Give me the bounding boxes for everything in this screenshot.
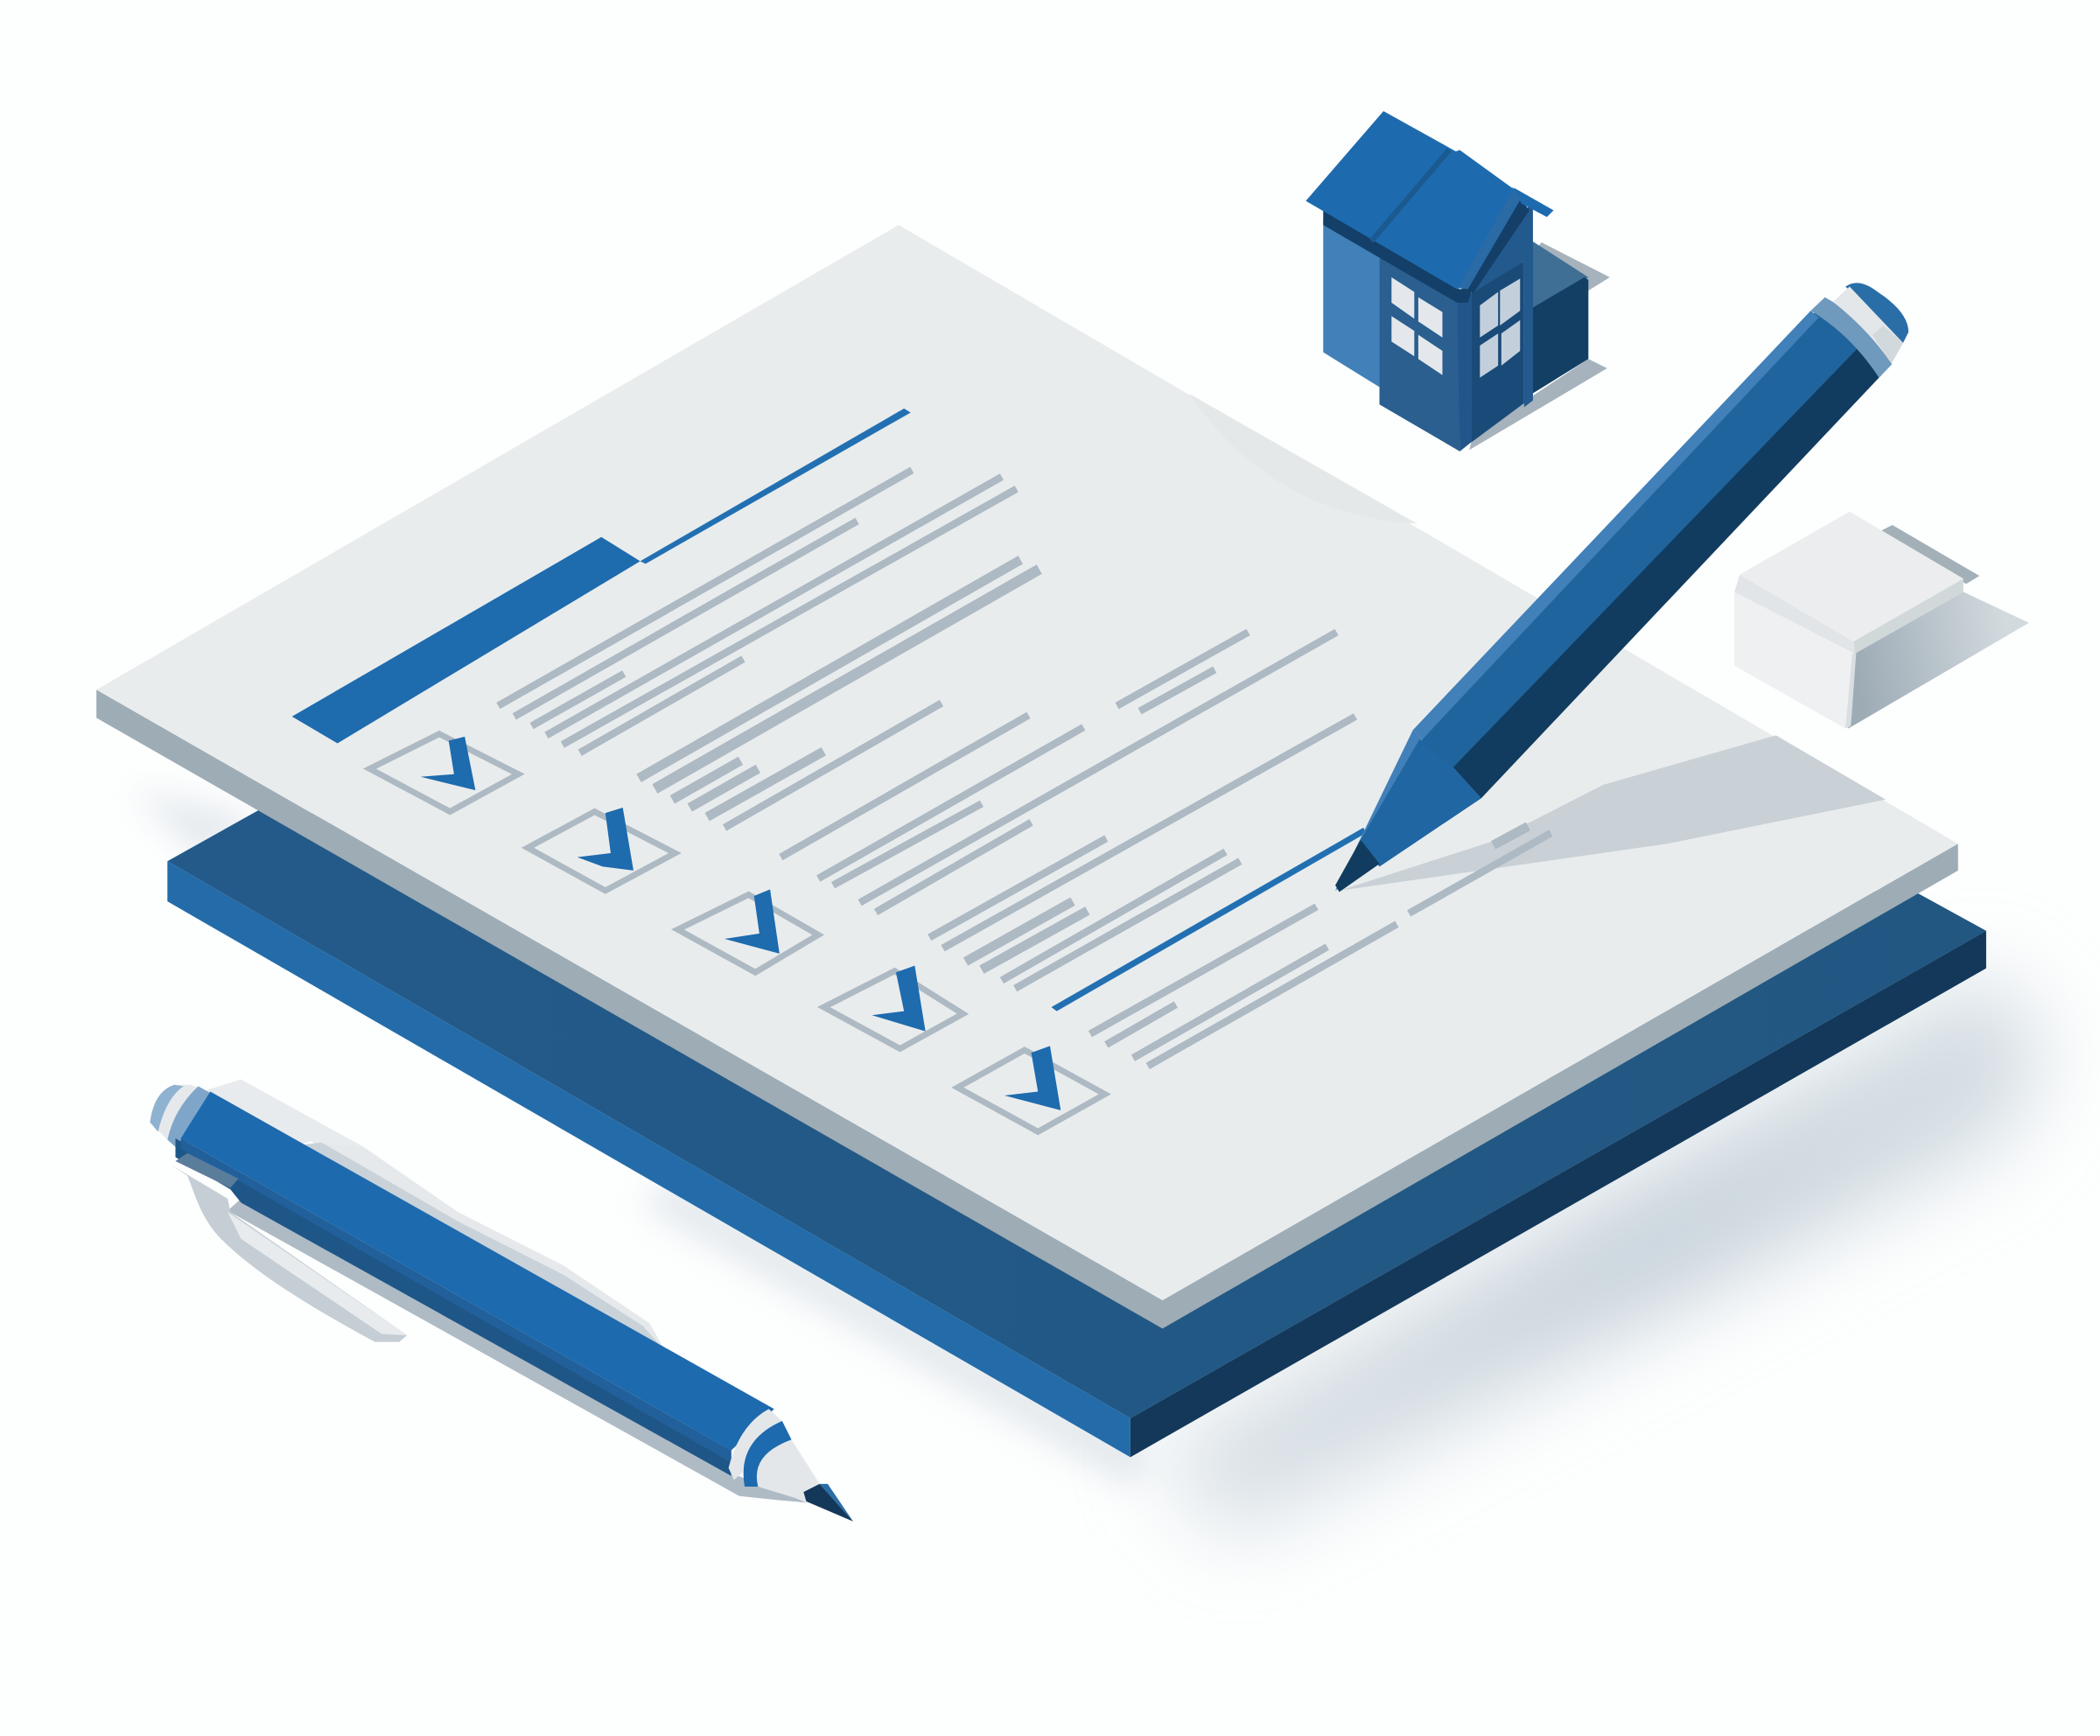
checkbox 1 [369,734,518,812]
checkbox 5 [957,1046,1105,1131]
roof [1306,111,1514,290]
title bar [292,409,911,744]
pen main body [181,1091,774,1451]
side windows [1480,278,1520,378]
body mid face [1361,305,1882,866]
front wall [1380,255,1460,452]
pen collar [729,1409,782,1480]
pen nib [803,1484,853,1522]
light band [1810,298,1892,378]
icon: pencil [1335,283,1908,892]
eraser cap [1845,283,1908,343]
left wall [1323,221,1380,387]
pen clip bottom [172,1166,407,1342]
nib [1335,840,1380,892]
tip highlight [1335,730,1423,891]
checkbox 4 [823,966,963,1048]
icon: house [1306,111,1610,452]
roof seam [1371,150,1449,242]
eave shadow band [1323,209,1474,303]
sheet surface [96,225,1958,1300]
body highlight face [1413,311,1819,739]
pen end cap [150,1085,209,1152]
house shadow arc on sheet [1189,394,1417,523]
side block [1532,242,1588,311]
house shadows [1532,242,1610,290]
clipboard board [167,810,1986,1457]
checklist text lines [498,470,1550,1066]
clip shadow on pen [176,1153,238,1188]
pen clip top [206,1080,363,1146]
pen lower shadow [228,1199,808,1502]
body dark face [1453,346,1879,798]
sheet thickness [96,690,1958,1328]
pen dark side highlight [181,1138,732,1462]
roof overhang [1514,187,1554,217]
floor shadow [134,790,2049,1540]
corner and door wall [1457,292,1474,452]
paper sheet [96,225,1958,1328]
ferrule white band [1833,287,1903,364]
gable roof edge [1457,187,1522,290]
board left edge [167,861,1130,1457]
board top surface [167,810,1986,1418]
icon: pen [150,1080,853,1522]
board right edge [1130,931,1986,1457]
pen dark side [176,1138,732,1476]
front windows [1391,277,1442,375]
tip mid [1361,739,1481,866]
gable dark trim [1465,197,1530,293]
pencil drawn line [1052,828,1366,1012]
pencil shadow on sheet [1340,735,1886,891]
icon: eraser [1734,512,2029,729]
checkbox 2 [528,808,675,891]
checkbox 3 [677,889,818,972]
pen cone [757,1439,820,1502]
